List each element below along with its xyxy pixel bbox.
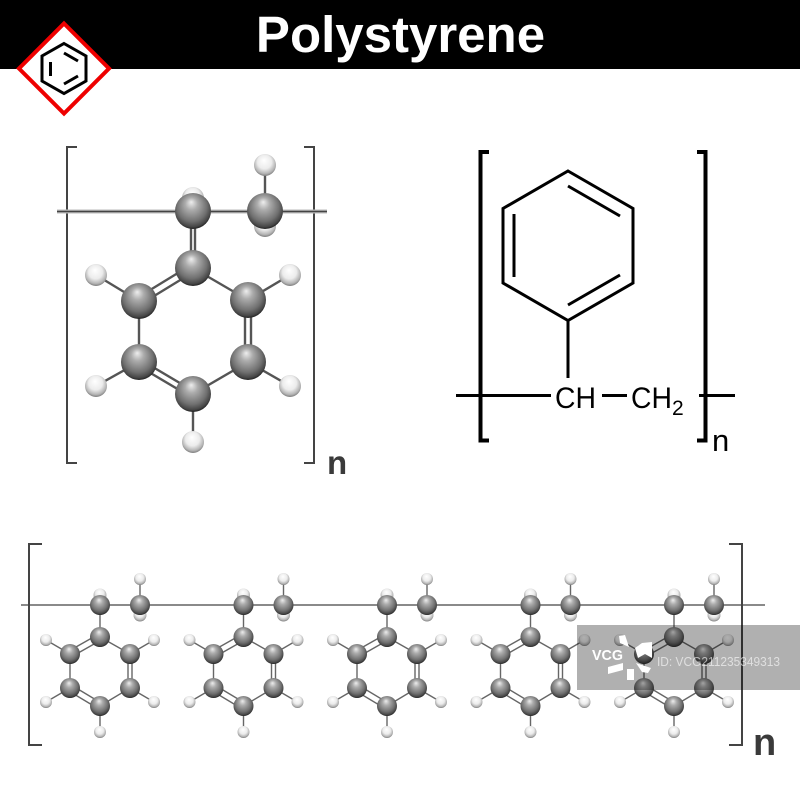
backbone: chain — [21, 604, 765, 606]
monomer unit 3 — [327, 573, 447, 738]
brackets: large model — [67, 147, 314, 463]
bonds: large model — [96, 165, 290, 442]
monomer unit 5 — [614, 573, 734, 738]
watermark band — [577, 625, 800, 690]
brackets: formula — [480, 152, 706, 440]
title bar — [0, 0, 800, 69]
watermark — [577, 625, 800, 690]
monomer unit 1 — [40, 573, 160, 738]
label: CH2: 2 — [672, 397, 684, 420]
carbon atoms: large model — [121, 193, 283, 412]
watermark logo — [592, 635, 652, 680]
watermark logo: VCG — [592, 647, 623, 664]
subscript n: formula: n — [712, 423, 729, 458]
benzene ring — [503, 171, 633, 320]
backbone chain: large model — [57, 210, 327, 214]
polymer chain model — [21, 544, 765, 745]
subscript n: large model: n — [327, 444, 347, 481]
monomer unit 4 — [470, 573, 590, 738]
label: CH2: CH — [631, 382, 672, 415]
subscript n: chain: n — [753, 722, 776, 764]
structural formula — [456, 152, 735, 440]
label: CH: CH — [555, 382, 596, 415]
ball-and-stick model: large monomer — [57, 147, 327, 463]
hydrogen atoms: large model — [85, 154, 301, 453]
brackets: chain — [29, 544, 742, 745]
watermark id: ID: VCG211235349313 — [657, 654, 780, 669]
bonds: formula — [456, 320, 735, 396]
title: Polystyrene — [256, 6, 545, 63]
monomer unit 2 — [184, 573, 304, 738]
icon: benzene hazard diamond — [19, 24, 109, 114]
